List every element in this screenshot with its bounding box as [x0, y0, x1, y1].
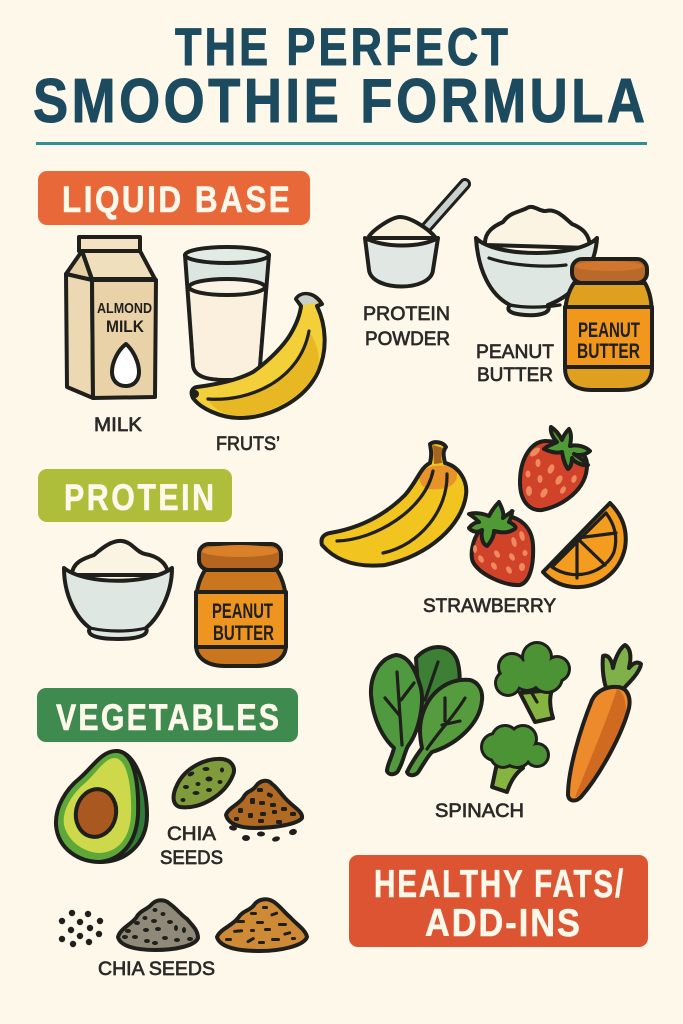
icon: glass of milk [185, 247, 269, 380]
icon: peanut butter jar: BUTTER [213, 622, 274, 645]
icon: orange slice [543, 503, 626, 587]
heading: vegetables [37, 688, 298, 742]
icon: avocado [56, 751, 147, 862]
icon: brown seed pile [226, 781, 302, 842]
label: strawberry: STRAWBERRY [423, 596, 556, 617]
label: chia seeds: SEEDS [160, 848, 223, 869]
icon: almond milk carton [66, 237, 156, 398]
label: chia seeds: CHIA [167, 824, 216, 845]
title: SMOOTHIE FORMULA [33, 67, 645, 136]
icon: peanut butter jar: PEANUT [212, 600, 273, 623]
label: chia seeds [160, 824, 223, 869]
title: THE PERFECT [175, 18, 508, 77]
label: peanut butter: BUTTER [477, 365, 553, 386]
heading: healthy fats / add-ins: ADD-INS [425, 901, 580, 944]
heading: protein [38, 469, 232, 522]
icon: bowl of protein [64, 541, 172, 639]
icon: broccoli bottom [480, 724, 550, 792]
icon: strawberry top [520, 427, 590, 510]
label: milk: MILK [94, 415, 142, 436]
icon: protein powder scoop [365, 184, 465, 286]
label: peanut butter [476, 342, 554, 386]
icon: banana with label [191, 294, 325, 418]
heading: liquid base [38, 171, 310, 225]
icon: seed pod [174, 759, 234, 807]
label: peanut butter: PEANUT [476, 342, 554, 363]
icon: grey seed pile [118, 900, 198, 950]
label: chia seeds bottom: CHIA SEEDS [98, 959, 215, 980]
icon: orange seed pile [217, 899, 307, 951]
icon: peanut butter jar [196, 544, 286, 666]
label: protein powder [363, 304, 450, 350]
icon: bowl of powder [476, 207, 597, 315]
heading: protein: PROTEIN [64, 477, 214, 519]
icon: broccoli top [494, 641, 571, 722]
label: protein powder: POWDER [365, 329, 450, 350]
icon: peanut butter jar [565, 259, 652, 390]
icon: spinach leaves [371, 647, 482, 775]
label: fruits: FRUTS’ [216, 434, 280, 455]
heading: healthy fats / add-ins: HEALTHY FATS/ [374, 863, 624, 906]
heading: healthy fats / add-ins [349, 855, 648, 947]
heading: liquid base: LIQUID BASE [62, 180, 290, 221]
label: spinach: SPINACH [435, 801, 524, 822]
heading: vegetables: VEGETABLES [56, 697, 279, 739]
icon: carrot [568, 645, 641, 801]
icon: banana [321, 442, 466, 566]
icon: almond milk carton: MILK [106, 317, 145, 336]
icon: strawberry bottom [469, 502, 533, 585]
icon: almond milk carton: ALMOND [97, 300, 152, 317]
label: protein powder: PROTEIN [363, 304, 450, 325]
icon: peanut butter jar: PEANUT [578, 319, 640, 342]
icon: scattered chia seeds [59, 910, 103, 947]
title [33, 18, 645, 136]
icon: peanut butter jar: BUTTER [577, 340, 640, 363]
